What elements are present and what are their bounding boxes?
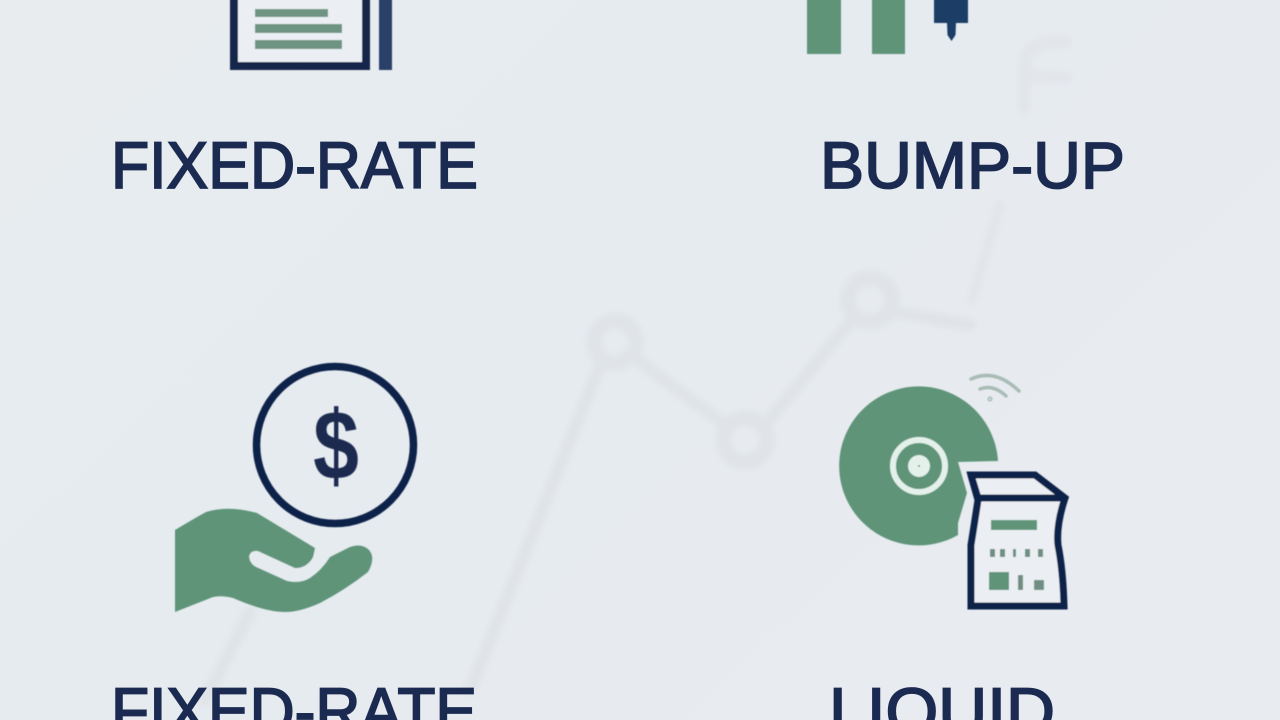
- icon: disc with receipt box: [839, 375, 1065, 606]
- hand: [175, 509, 372, 612]
- icon: document: [234, 0, 392, 70]
- icon: bar chart with candlestick: [807, 0, 968, 54]
- box: [971, 475, 1065, 606]
- disc: [839, 386, 998, 545]
- icon: hand holding dollar coin: [175, 366, 414, 612]
- heading: fixed-rate (top): FIXED-RATE: [111, 128, 478, 202]
- dollar sign: $: [313, 391, 359, 501]
- wifi signal: [971, 375, 1019, 400]
- heading: bump-up: BUMP-UP: [820, 128, 1125, 202]
- watermark: faint rising line chart: [205, 42, 1066, 700]
- coin: [256, 366, 414, 524]
